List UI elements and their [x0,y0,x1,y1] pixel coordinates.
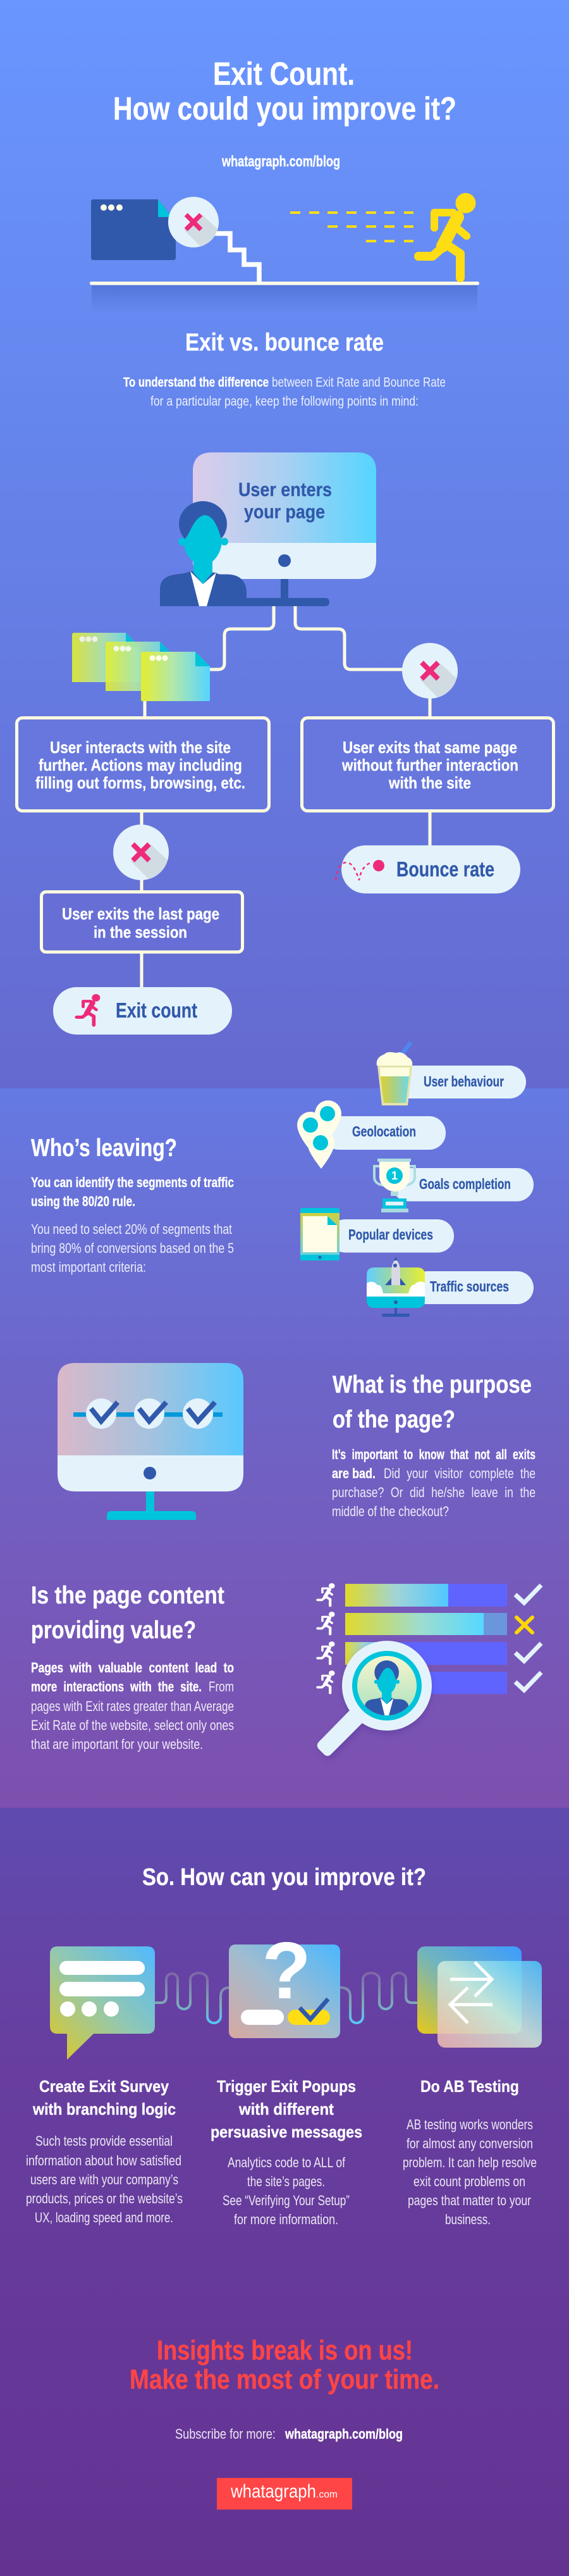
logo [217,2478,352,2510]
icon: exit popup: ? [262,1926,311,2015]
column: exit popups [211,2077,362,2227]
pill: bounce rate [336,845,520,893]
icon: pink runner [76,994,100,1025]
criterion: popular devices [300,1208,454,1260]
icon: running figure [419,193,475,278]
section: who's leaving text: using the 80/20 rule. [31,1193,135,1209]
criterion: goals completion [374,1159,534,1212]
progress line [73,1412,223,1417]
box: user exits last page: User exits the last page [62,904,219,923]
column: exit popups: with different [238,2100,334,2119]
box: user interacts [16,718,269,811]
ground line [90,282,479,313]
column: ab testing: business. [445,2212,491,2227]
pill: bounce rate: Bounce rate [396,857,494,881]
icon: tablet [300,1208,340,1260]
section: who's leaving text: Who’s leaving? [31,1135,177,1162]
icon: check 2 [134,1398,166,1429]
pill: exit count [53,987,232,1035]
criterion: user behaviour [377,1042,526,1105]
column: exit popups: the site’s pages. [247,2174,325,2189]
column: ab testing: problem. It can help resolve [403,2155,537,2170]
intro text [123,375,446,409]
intro text: To understand the difference [123,375,269,390]
bar row 2 [317,1612,532,1635]
section: content value text: From [209,1679,234,1695]
section: who's leaving text: You can identify the segments of traffic [31,1174,234,1190]
subscribe line: Subscribe for more: [175,2426,276,2442]
box: user exits same page: User exits that same page [343,738,517,757]
icon: exit cross [168,197,219,247]
icon: monitor rocket [367,1257,425,1317]
section: content value text: more interactions with the site. [31,1679,202,1695]
column: ab testing: exit count problems on [413,2174,525,2189]
icon: milkshake [377,1042,412,1105]
icon: map pins [297,1100,341,1169]
bar row 1 [317,1583,541,1607]
subscribe line [175,2426,403,2442]
icon: bouncing ball [336,860,384,880]
logo: whatagraph [230,2481,316,2502]
heading: how can you improve: So. How can you improve it? [142,1864,426,1891]
section: purpose text: are bad. [332,1465,376,1481]
section: purpose text: of the page? [333,1406,455,1433]
section: content value text: providing value? [31,1617,196,1644]
icon: exit cross right [402,643,458,699]
section: who's leaving text [31,1135,234,1275]
blog url: whatagraph.com/blog [221,153,340,170]
section: content value text: Exit Rate of the website, select only ones [31,1717,234,1733]
icon: exit cross left [113,824,169,880]
column: ab testing: pages that matter to your [408,2193,531,2208]
subscribe line: whatagraph.com/blog [284,2426,403,2442]
title [113,56,456,127]
icon: exit popup [229,1926,340,2038]
connectors [142,606,430,988]
icon: check 3 [183,1398,215,1429]
icon: user [160,501,247,606]
call to action: Make the most of your time. [130,2364,439,2395]
bar chart: exit rates [317,1583,541,1694]
column: ab testing: AB testing works wonders [407,2117,533,2132]
box: user exits same page: without further interaction [341,756,518,775]
wave connectors [155,1973,417,2023]
section: who's leaving text: bring 80% of conversions based on the 5 [31,1240,234,1256]
column: ab testing: for almost any conversion [407,2136,533,2151]
section: content value text [31,1582,234,1752]
box: user exits last page: in the session [94,923,187,942]
intro text: for a particular page, keep the following points in mind: [150,394,419,409]
column: exit popups: persuasive messages [211,2122,362,2141]
column: exit survey [26,2077,183,2225]
column: exit survey: Create Exit Survey [39,2077,169,2096]
icon: survey bubble [50,1946,155,2060]
intro text: between Exit Rate and Bounce Rate [272,375,446,390]
icon: browser window [91,199,176,260]
criterion: goals completion: Goals completion [419,1176,511,1192]
bar row 4 [317,1671,541,1694]
monitor: user enters your page: your page [244,501,325,523]
icon: trophy [374,1159,415,1212]
monitor: user enters your page: User enters [238,478,332,501]
criterion: popular devices: Popular devices [348,1226,433,1243]
column: exit survey: with branching logic [32,2100,176,2119]
column: exit survey: information about how satisfied [26,2153,181,2168]
bar row 3 [317,1641,541,1665]
title: How could you improve it? [113,90,456,127]
icon: stairs [215,233,259,283]
criterion: geolocation [297,1100,446,1169]
logo: .com [316,2489,338,2500]
column: exit popups: Trigger Exit Popups [217,2077,356,2096]
criterion: user behaviour: User behaviour [424,1073,504,1090]
column: exit popups: for more information. [234,2212,338,2227]
criterion: geolocation: Geolocation [352,1123,416,1140]
column: ab testing: Do AB Testing [420,2077,519,2096]
icon: trophy: 1 [391,1169,398,1182]
column: exit survey: users are with your company’s [30,2172,178,2187]
icon: magnifier [317,1641,432,1760]
box: user interacts: further. Actions may including [39,756,242,775]
criterion: traffic sources [367,1257,534,1317]
box: user interacts: filling out forms, browsing, etc. [35,773,245,792]
title: Exit Count. [213,56,355,92]
box: user exits last page [42,892,243,952]
box: user exits same page [302,718,554,811]
column: exit survey: products, prices or the website’s [26,2191,183,2206]
heading: exit vs bounce: Exit vs. bounce rate [185,329,384,356]
icon: ab testing cards [417,1946,542,2048]
icon: check 1 [86,1398,118,1429]
call to action: Insights break is on us! [157,2335,413,2366]
criterion: traffic sources: Traffic sources [430,1278,509,1295]
section: content value text: pages with Exit rates greater than Average [31,1698,234,1714]
column: exit survey: Such tests provide essential [35,2133,173,2149]
column: ab testing [403,2077,537,2227]
hero illustration [90,193,479,313]
section: purpose text [332,1371,535,1519]
column: exit popups: See “Verifying Your Setup” [223,2193,350,2208]
column: exit popups: Analytics code to ALL of [228,2155,346,2170]
section: purpose text: What is the purpose [333,1371,532,1398]
box: user interacts: User interacts with the site [50,738,231,757]
section: purpose text: middle of the checkout? [332,1503,449,1519]
monitor: check steps [58,1363,243,1520]
section: who's leaving text: You need to select 20% of segments that [31,1221,232,1237]
section: who's leaving text: most important criteria: [31,1259,146,1275]
section: content value text: Is the page content [31,1582,224,1609]
pill: exit count: Exit count [116,999,197,1022]
column: exit survey: UX, loading speed and more. [35,2210,173,2225]
section: content value text: Pages with valuable content lead to [31,1660,234,1676]
speed dashes [290,211,413,242]
call to action [130,2335,439,2395]
box: user exits same page: with the site [388,773,471,792]
icon: stacked pages [72,633,210,701]
section: content value text: that are important for your website. [31,1736,203,1752]
monitor: user enters your page [193,452,376,606]
